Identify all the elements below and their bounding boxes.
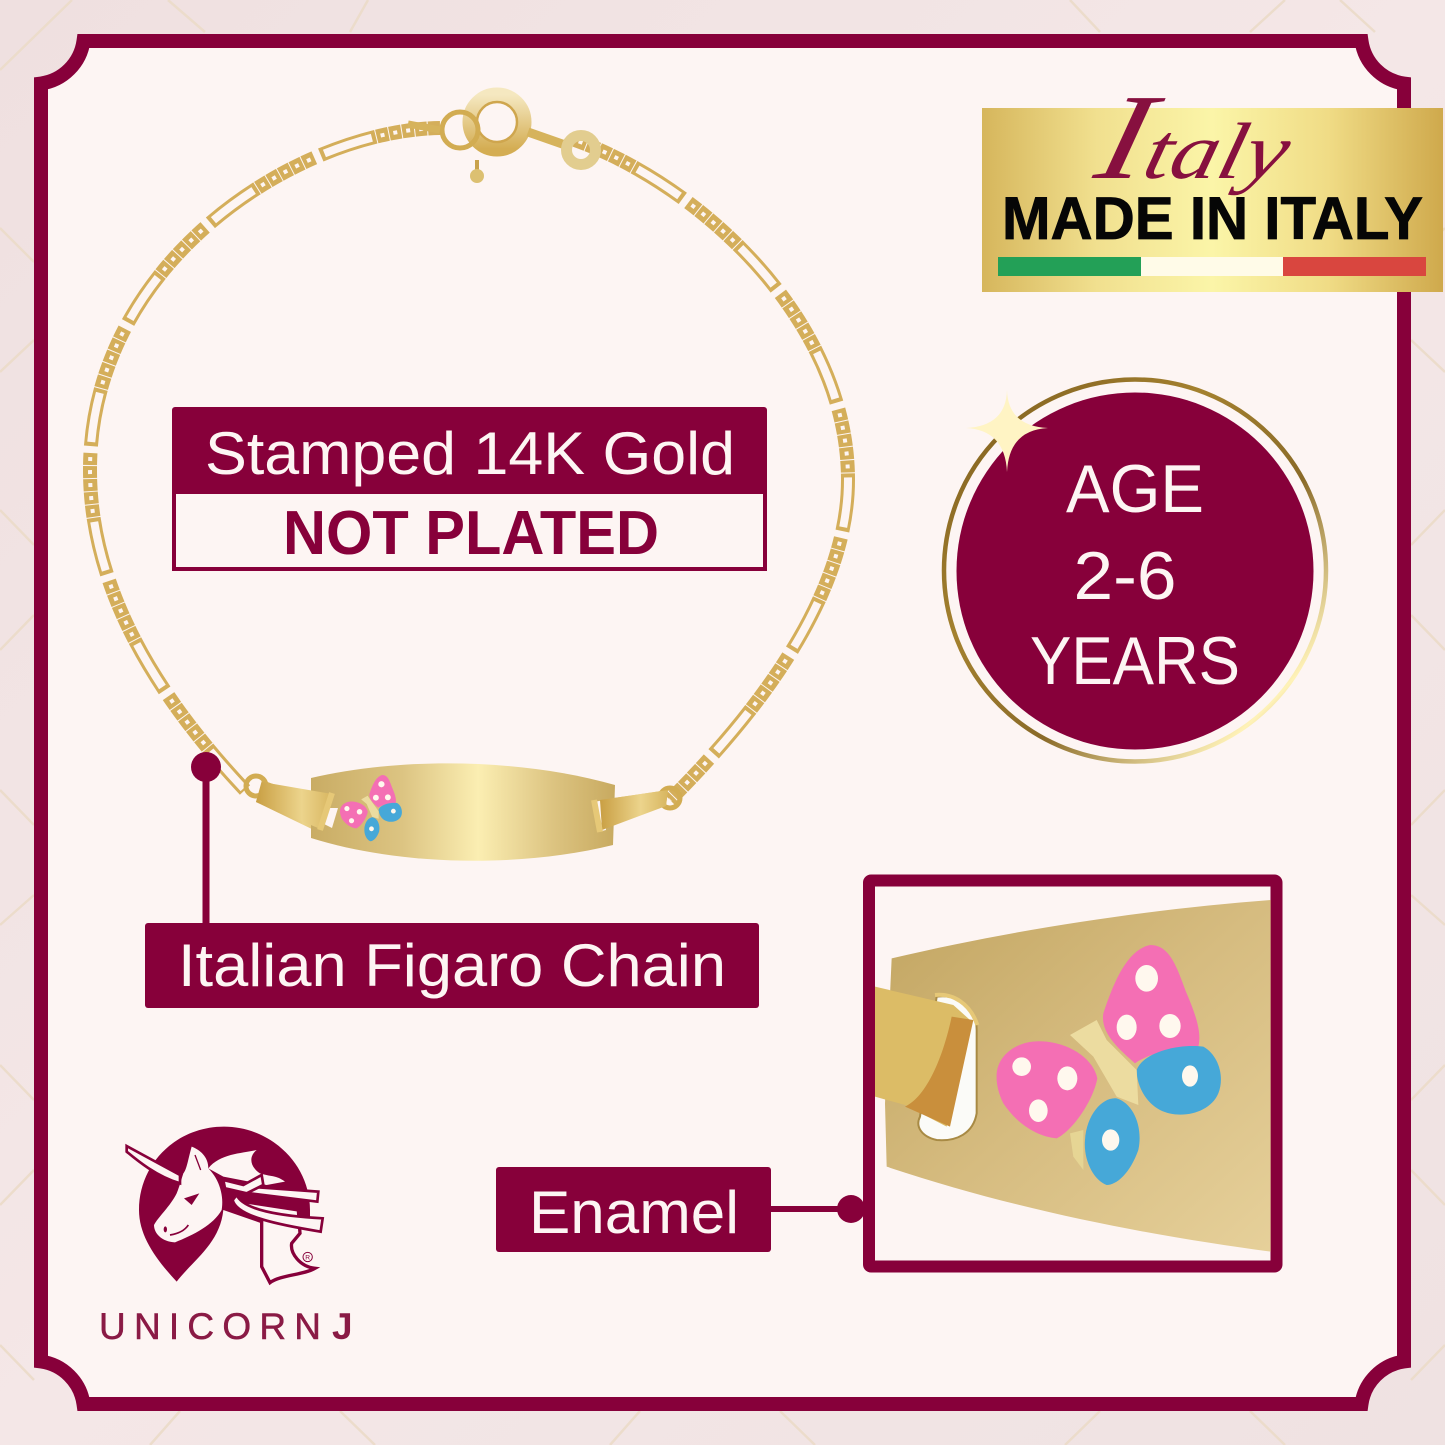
close-up plate xyxy=(885,900,1271,1252)
slot xyxy=(918,996,977,1140)
italian flag stripe xyxy=(998,257,1426,276)
text: italy script: Italy xyxy=(1084,70,1310,205)
id plate xyxy=(311,763,615,861)
label: italian figaro chain xyxy=(145,923,759,1008)
plate slots and tabs xyxy=(256,782,668,832)
icon: unicorn head: R xyxy=(305,1255,310,1262)
panel: enamel close-up xyxy=(869,880,1276,1266)
badge: age 2-6 years xyxy=(944,380,1326,762)
label: stamped 14K gold xyxy=(172,407,767,569)
icon: sparkle xyxy=(966,390,1048,472)
maroon disc xyxy=(956,392,1314,750)
logo: unicornj xyxy=(99,1127,353,1347)
pointer: figaro chain xyxy=(191,752,221,927)
text: years: YEARS xyxy=(1030,623,1240,699)
icon: unicorn head xyxy=(127,1127,323,1283)
figaro chain xyxy=(90,128,848,800)
text: made in italy: MADE IN ITALY xyxy=(1002,185,1423,252)
text: 2-6: 2-6 xyxy=(1074,538,1176,614)
id plate connectors xyxy=(246,776,680,832)
label: enamel: Enamel xyxy=(529,1179,739,1246)
icon: large butterfly xyxy=(997,945,1221,1185)
text: stamped 14K gold: Stamped 14K Gold xyxy=(205,420,735,487)
label: enamel xyxy=(496,1167,771,1252)
label: italian figaro chain: Italian Figaro Chain xyxy=(178,932,726,999)
spring ring clasp xyxy=(408,95,596,183)
wordmark: UNICORN xyxy=(99,1306,321,1347)
stamped heading bar xyxy=(172,407,767,494)
gold ring xyxy=(944,380,1326,762)
bracelet photo xyxy=(90,95,848,861)
text: not plated: NOT PLATED xyxy=(283,499,659,568)
icon: small butterfly xyxy=(340,775,402,841)
pointer: enamel xyxy=(770,1195,865,1223)
connector tab xyxy=(875,987,970,1127)
not plated outlined box xyxy=(174,480,765,569)
wordmark letter J: J xyxy=(332,1306,353,1347)
text: age: AGE xyxy=(1066,451,1204,527)
badge: made in italy xyxy=(982,70,1443,292)
